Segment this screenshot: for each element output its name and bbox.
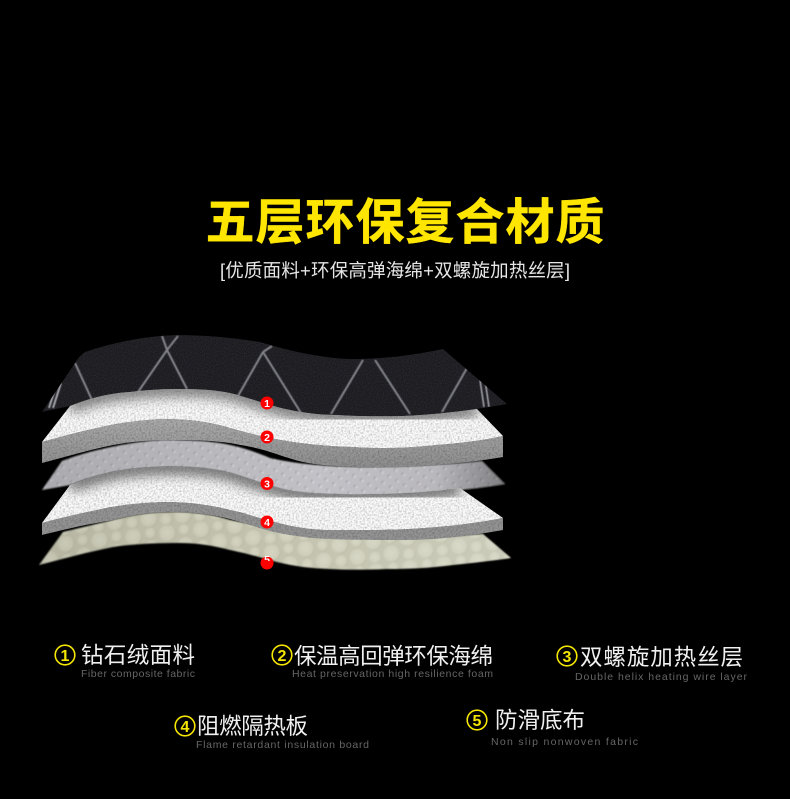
icon: number 5 [467, 710, 487, 730]
icon: number 4 [175, 716, 195, 736]
english label: Heat preservation high resilience foam [292, 668, 493, 680]
legend item 5 [467, 708, 638, 748]
title: 五层环保复合材质 [206, 196, 604, 250]
layered material illustration [39, 335, 511, 570]
icon: number 3: 3 [563, 649, 572, 666]
icon: number 2: 2 [278, 648, 287, 665]
layer 4: flame retardant board [42, 467, 503, 540]
english label: Double helix heating wire layer [575, 671, 748, 683]
icon: number 5: 5 [473, 713, 482, 730]
marker 4 [260, 516, 274, 529]
marker 1: 1 [264, 398, 270, 410]
legend item 3 [557, 645, 748, 683]
label: 防滑底布 [495, 708, 585, 733]
label: 保温高回弹环保海绵 [294, 644, 493, 669]
label: 双螺旋加热丝层 [580, 645, 743, 670]
icon: number 3 [557, 646, 577, 666]
label: 钻石绒面料 [81, 643, 195, 668]
legend item 2 [272, 644, 493, 680]
layer 2: foam sheet [42, 389, 503, 467]
icon: number 1: 1 [61, 648, 70, 665]
english label: Non slip nonwoven fabric [491, 736, 638, 748]
legend item 4 [175, 714, 369, 751]
marker 5: 5 [264, 554, 270, 566]
icon: number 4: 4 [181, 719, 190, 736]
marker 2: 2 [264, 432, 270, 444]
marker 4: 4 [264, 517, 270, 529]
red number markers [260, 396, 274, 570]
marker 3: 3 [264, 478, 270, 490]
english label: Fiber composite fabric [81, 668, 195, 680]
layer 3: dotted white film [42, 440, 505, 495]
icon: number 2 [272, 645, 292, 665]
marker 5 [260, 556, 274, 570]
layer 5: beige bubble bottom fabric [39, 512, 511, 570]
marker 2 [260, 430, 274, 444]
subtitle: [优质面料+环保高弹海绵+双螺旋加热丝层] [220, 260, 570, 281]
marker 3 [260, 477, 274, 490]
marker 1 [260, 396, 274, 410]
english label: Flame retardant insulation board [196, 739, 369, 751]
legend item 1 [55, 643, 195, 680]
layer 1: diamond quilted fabric [42, 335, 507, 416]
label: 阻燃隔热板 [197, 714, 308, 739]
